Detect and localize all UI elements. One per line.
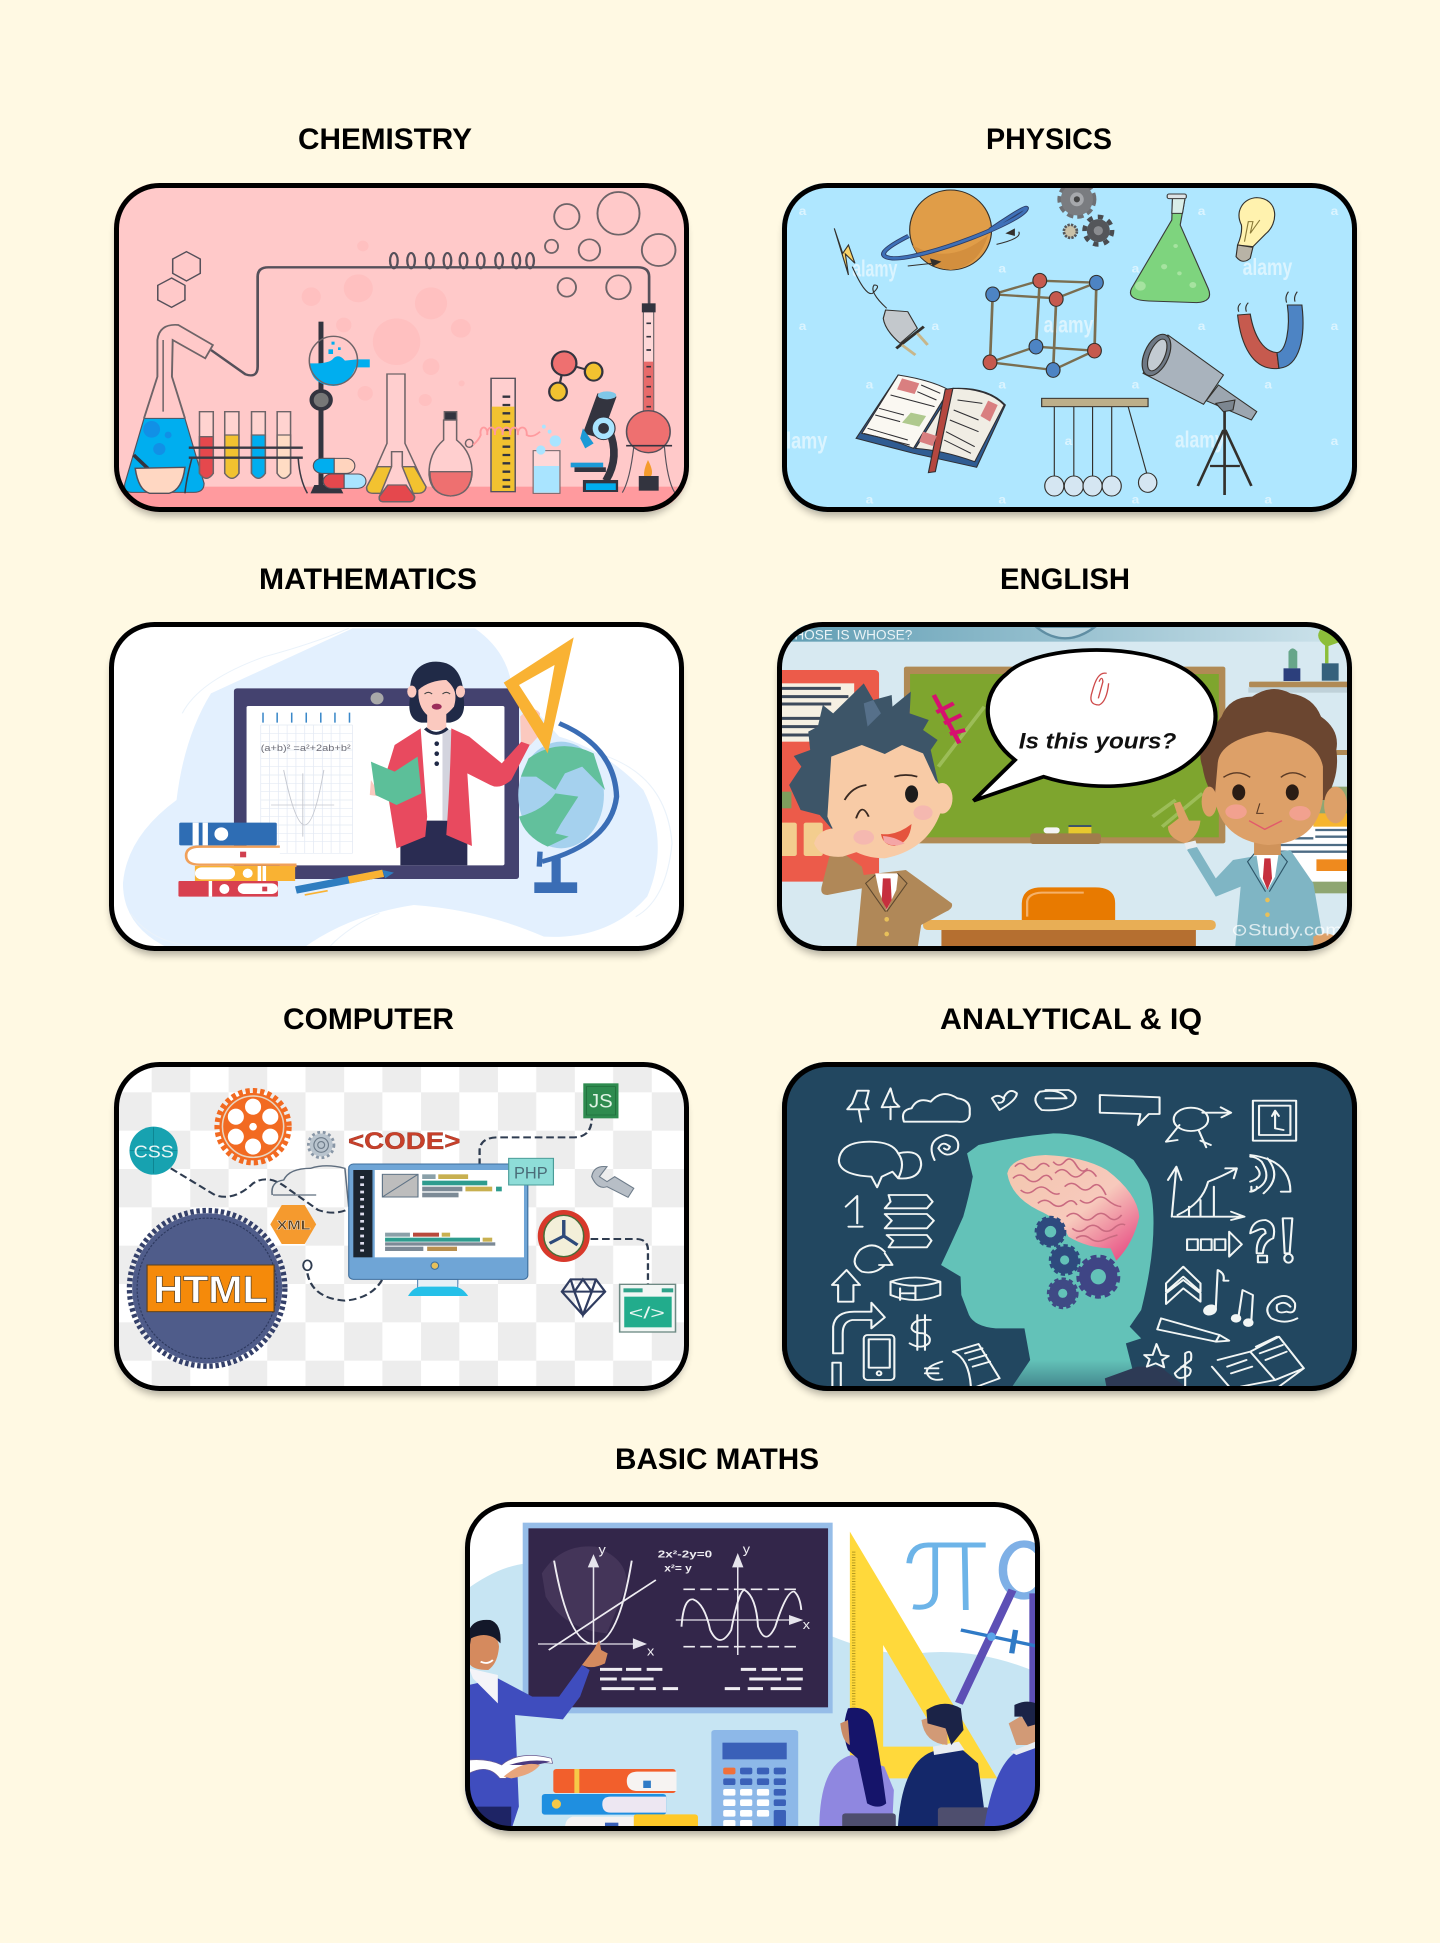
left student <box>789 683 953 950</box>
card border <box>784 1064 1354 1388</box>
card shadow <box>784 1071 1354 1395</box>
gears <box>1060 182 1112 244</box>
card shadow <box>116 192 686 516</box>
monitor <box>349 1164 528 1296</box>
watermarks: lamy <box>786 429 828 454</box>
watermarks: a <box>998 262 1007 275</box>
speech bubble <box>974 650 1216 801</box>
molecule <box>549 351 602 401</box>
magnet <box>1238 292 1303 369</box>
heading: english: ENGLISH <box>1000 563 1130 596</box>
watermarks <box>786 204 1339 506</box>
watermarks: a <box>1132 262 1140 275</box>
html badge <box>129 1211 285 1366</box>
teacher <box>461 1620 608 1830</box>
xml hexagon <box>270 1205 316 1244</box>
card border <box>784 186 1354 510</box>
book stack <box>542 1769 698 1831</box>
card shadow <box>116 1071 686 1395</box>
checkerboard background <box>111 1060 689 1393</box>
teacher <box>370 662 540 865</box>
desk <box>923 887 1216 950</box>
chalkboard <box>523 1523 833 1713</box>
html badge: HTML <box>154 1268 268 1311</box>
watermarks: a <box>1132 492 1140 506</box>
background blob <box>123 628 658 948</box>
heading: physics: PHYSICS <box>986 123 1112 156</box>
chalkboard: x <box>803 1618 810 1632</box>
watermarks: a <box>1264 492 1273 506</box>
planet <box>884 190 1026 270</box>
css badge: CSS <box>134 1142 174 1161</box>
watermarks: alamy <box>852 257 898 282</box>
panel: analytical and iq <box>782 1003 1357 1395</box>
speech bubble: Is this yours? <box>1019 729 1177 754</box>
chalkboard: 2x²-2y=0 <box>658 1549 712 1560</box>
bubbles <box>545 192 676 299</box>
light bulb <box>1236 198 1275 261</box>
stacked books <box>178 823 295 897</box>
watermarks: a <box>1331 204 1339 218</box>
lightning and plug <box>834 228 928 355</box>
watermarks: a <box>1132 377 1140 391</box>
illustration: chemistry lab <box>111 183 689 512</box>
top banner: WHOSE IS WHOSE? <box>781 627 912 643</box>
watermarks: alamy <box>1044 313 1094 338</box>
card shadow <box>784 192 1354 516</box>
right shelf and poster <box>1248 632 1352 893</box>
heading: chemistry: CHEMISTRY <box>298 123 472 156</box>
illustration: physics objects <box>782 182 1357 512</box>
right student <box>1168 689 1347 950</box>
tablet <box>234 688 519 879</box>
code window <box>620 1284 676 1332</box>
watermarks: a <box>866 492 874 506</box>
card shadow <box>467 1511 1037 1835</box>
student in navy jacket <box>898 1704 990 1830</box>
calculator <box>711 1730 798 1830</box>
chalkboard: y <box>598 1543 606 1557</box>
beaker <box>533 425 561 493</box>
watermarks: alamy <box>1243 255 1293 281</box>
compass <box>959 1544 1045 1703</box>
watermarks: a <box>931 319 940 333</box>
globe <box>518 723 617 893</box>
watermarks: a <box>1331 434 1339 448</box>
round bottom flask <box>429 412 473 496</box>
dashed connectors <box>171 1118 648 1301</box>
illustration: two students classroom <box>776 622 1352 951</box>
illustration: maths classroom <box>461 1502 1045 1831</box>
watermarks: a <box>1065 434 1073 448</box>
brain <box>1007 1155 1139 1261</box>
card border <box>116 186 686 510</box>
code label: <CODE> <box>348 1129 460 1155</box>
watermarks: a <box>1331 319 1339 333</box>
open book <box>856 375 1005 473</box>
code window: </> <box>629 1303 665 1322</box>
watermark: ⊙Study.com <box>1231 921 1342 939</box>
neck shading <box>1011 1360 1137 1388</box>
card border <box>116 1064 686 1388</box>
watermarks: a <box>998 492 1007 506</box>
panel: chemistry <box>111 123 689 516</box>
pink coil <box>473 427 540 445</box>
small gear bulb <box>309 1133 333 1157</box>
illustration: teacher with tablet <box>109 622 684 951</box>
heading: basic maths: BASIC MATHS <box>615 1443 819 1476</box>
orange gear <box>217 1091 289 1162</box>
card border <box>780 624 1350 948</box>
php tag: PHP <box>514 1163 548 1182</box>
wrench <box>592 1166 634 1197</box>
student with ponytail <box>819 1708 896 1830</box>
heading: analytical and iq: ANALYTICAL & IQ <box>940 1003 1202 1036</box>
top banner <box>776 625 1352 643</box>
watermarks: a <box>1264 377 1273 391</box>
set square <box>850 1532 997 1778</box>
js badge <box>583 1083 618 1118</box>
microscope <box>571 391 618 492</box>
student on right <box>984 1702 1039 1830</box>
watermarks: a <box>799 204 807 218</box>
card border <box>468 1504 1038 1828</box>
notebook graph: (a+b)² =a²+2ab+b² <box>261 744 352 754</box>
newton's cradle <box>1042 398 1157 496</box>
xml hexagon: XML <box>277 1218 311 1233</box>
conical flask <box>125 325 213 493</box>
triangle ruler <box>504 637 574 753</box>
shoulder shadow <box>1105 1367 1187 1388</box>
watermarks: a <box>1198 319 1206 333</box>
watermarks: a <box>799 319 807 333</box>
hexagons <box>158 252 200 307</box>
watermarks: a <box>866 377 874 391</box>
tubing and coil <box>211 253 649 375</box>
pen <box>296 870 394 895</box>
distillation flask and burner <box>622 303 675 493</box>
chalkboard <box>904 667 1225 844</box>
left bulletin board <box>776 670 879 882</box>
watermarks: alamy <box>1175 428 1225 453</box>
clock <box>1036 627 1095 638</box>
watermarks: a <box>998 377 1007 391</box>
panel: mathematics <box>109 563 684 955</box>
panel: basic maths <box>461 1443 1045 1835</box>
graduated cylinder <box>491 378 515 492</box>
pi symbol <box>909 1545 986 1610</box>
panel: computer <box>111 1003 689 1395</box>
heading: mathematics: MATHEMATICS <box>259 563 477 596</box>
erlenmeyer flask <box>367 374 426 502</box>
panel: physics <box>782 123 1357 516</box>
diamond <box>562 1279 605 1315</box>
heading: computer: COMPUTER <box>283 1003 454 1036</box>
card shadow <box>111 631 681 955</box>
php tag <box>509 1158 553 1185</box>
chalk doodles <box>832 1088 1304 1387</box>
head gears <box>1036 1217 1118 1308</box>
molecular cube <box>983 273 1103 377</box>
clock <box>538 1210 590 1262</box>
card shadow <box>779 631 1349 955</box>
chalkboard: x <box>647 1644 655 1658</box>
watermarks: a <box>1198 204 1206 218</box>
head silhouette <box>941 1133 1154 1388</box>
notebook graph <box>261 713 353 853</box>
test tubes in rack <box>199 412 291 478</box>
telescope <box>1136 331 1257 495</box>
pills <box>313 458 366 488</box>
cloud <box>272 1166 349 1207</box>
chalkboard: y <box>743 1542 750 1556</box>
retort stand <box>309 322 370 493</box>
green flask <box>1130 194 1210 303</box>
css badge <box>129 1127 178 1175</box>
illustration: head with brain and doodles <box>782 1062 1357 1391</box>
illustration: web technologies <box>111 1060 689 1393</box>
watermarks: a <box>931 204 940 218</box>
card border <box>112 624 682 948</box>
panel: english <box>776 563 1352 955</box>
light blue backdrop <box>461 1563 1039 1830</box>
js badge: JS <box>589 1091 613 1112</box>
chalkboard: x²= y <box>664 1563 692 1574</box>
